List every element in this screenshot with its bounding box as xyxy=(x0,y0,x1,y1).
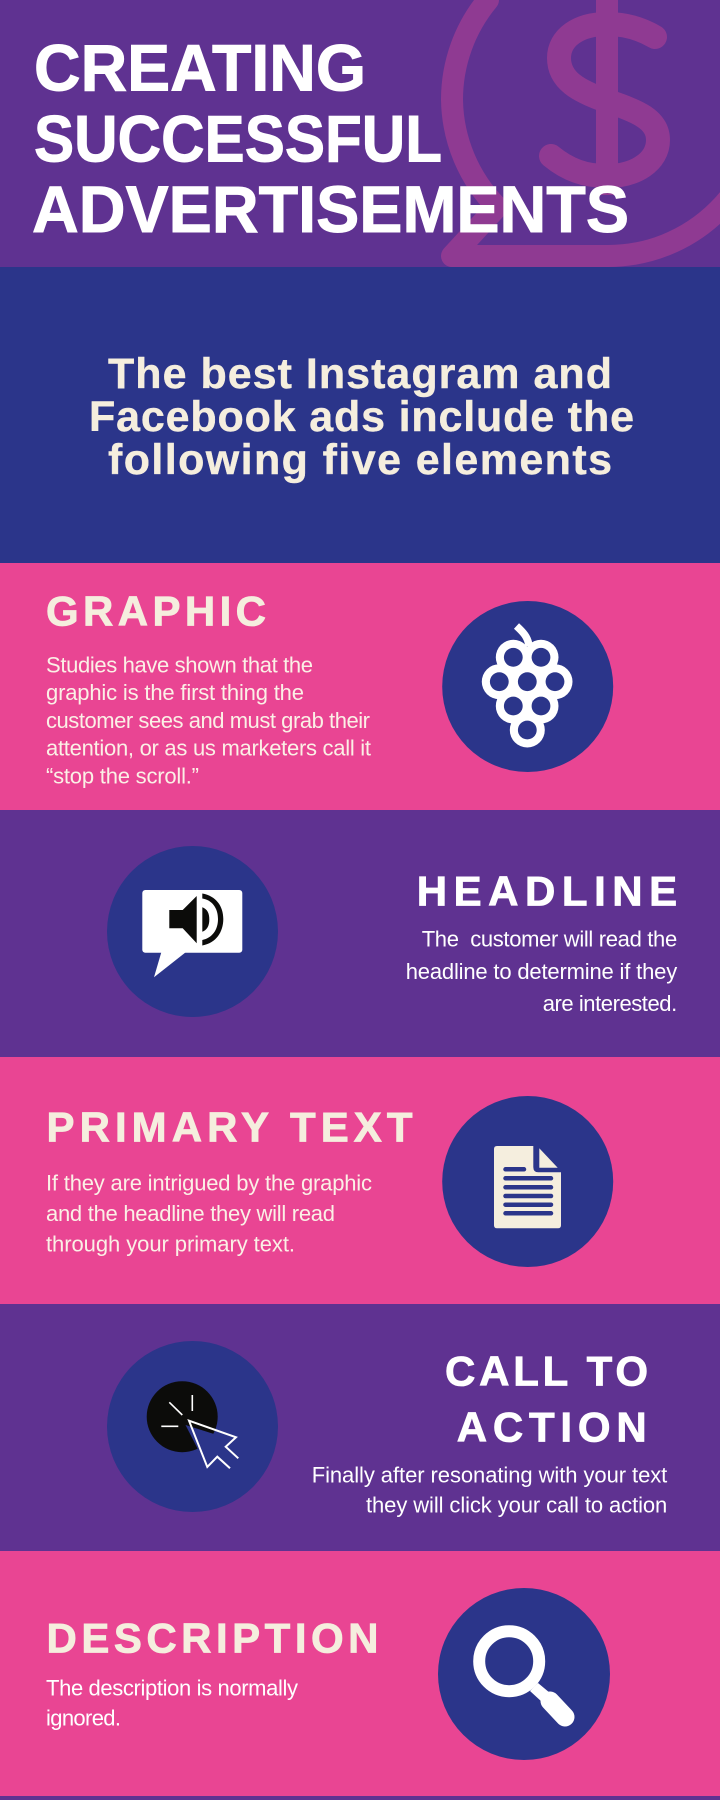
panel: primary text xyxy=(0,1057,720,1304)
text: headline description: The customer will read the xyxy=(422,927,677,952)
heading: primary text: PRIMARY TEXT xyxy=(46,1104,413,1151)
text: primary text description: through your primary text. xyxy=(46,1232,295,1257)
heading: call to action: ACTION xyxy=(457,1404,647,1451)
text: headline description: headline to determine if they xyxy=(406,959,677,984)
title xyxy=(32,30,629,246)
text: description body: The description is normally xyxy=(46,1676,298,1701)
icon: grapes in circle xyxy=(442,601,613,772)
text: graphic description xyxy=(46,652,371,788)
text: call to action description: they will click your call to action xyxy=(366,1493,667,1518)
text: graphic description: graphic is the first thing the xyxy=(46,680,304,705)
text: call to action description: Finally after resonating with your text xyxy=(312,1463,667,1488)
title: CREATING xyxy=(34,30,366,104)
text: description body xyxy=(46,1676,298,1731)
icon: dollar speech bubble background xyxy=(452,0,720,256)
text: primary text description: and the headline they will read xyxy=(46,1201,335,1226)
footer strip xyxy=(0,1796,720,1800)
intro text xyxy=(89,350,634,484)
panel: call to action xyxy=(0,1304,720,1551)
heading: description: DESCRIPTION xyxy=(46,1614,378,1661)
intro text: Facebook ads include the xyxy=(89,393,634,441)
text: graphic description: “stop the scroll.” xyxy=(46,763,199,788)
panel: headline xyxy=(0,810,720,1057)
text: graphic description: attention, or as us marketers call it xyxy=(46,736,371,761)
intro text: following five elements xyxy=(108,436,612,484)
panel: graphic xyxy=(0,563,720,810)
heading: headline: HEADLINE xyxy=(417,868,677,915)
panel: introduction xyxy=(0,267,720,563)
text: headline description xyxy=(406,927,677,1016)
title: ADVERTISEMENTS xyxy=(32,172,629,246)
heading: graphic: GRAPHIC xyxy=(46,588,266,634)
text: graphic description: customer sees and must grab their xyxy=(46,708,370,733)
text: graphic description: Studies have shown that the xyxy=(46,652,313,677)
text: primary text description xyxy=(46,1171,372,1257)
icon: magnifying glass in circle xyxy=(438,1588,610,1760)
icon: mouse click in circle xyxy=(107,1341,278,1512)
icon: speaker speech bubble in circle xyxy=(107,846,278,1017)
panel: description xyxy=(0,1551,720,1796)
text: call to action description xyxy=(312,1463,667,1518)
text: headline description: are interested. xyxy=(543,991,677,1016)
text: description body: ignored. xyxy=(46,1706,121,1731)
title: SUCCESSFUL xyxy=(34,102,442,176)
text: primary text description: If they are intrigued by the graphic xyxy=(46,1171,372,1196)
heading: call to action: CALL TO xyxy=(445,1348,648,1395)
intro text: The best Instagram and xyxy=(108,350,612,398)
panel: header xyxy=(0,0,720,267)
icon: document in circle xyxy=(442,1096,613,1267)
heading: call to action xyxy=(445,1348,648,1451)
